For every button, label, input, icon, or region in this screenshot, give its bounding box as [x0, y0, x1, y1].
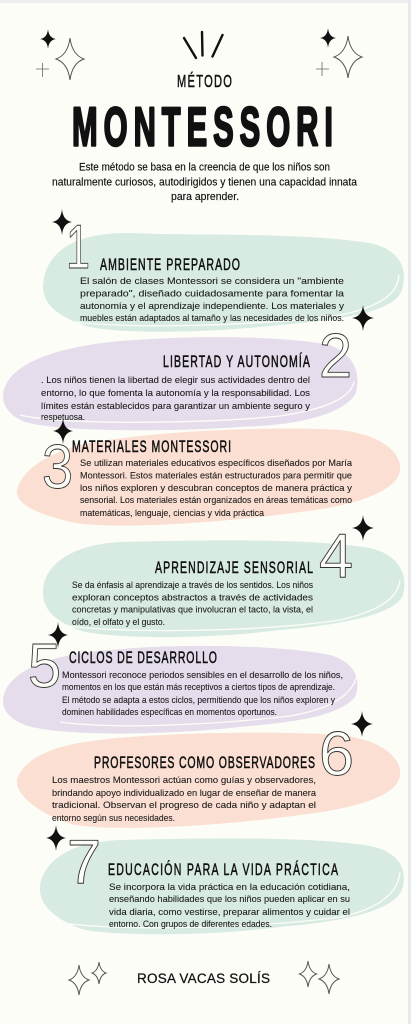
text: aprendizaje sensorial: concretas y manipulativas que involucran el tacto, la vista, el [72, 604, 313, 614]
text: ciclos de desarrollo: momentos en los que están más receptivos a ciertos tipos de aprendizaje. [62, 682, 335, 692]
text: profesores como observadores: brindando apoyo individualizado en lugar de enseñar de manera [52, 788, 316, 798]
heading: ambiente preparado: AMBIENTE PREPARADO [100, 254, 240, 274]
sparkles top right [316, 28, 362, 78]
intro text: Este método se basa en la creencia de que los niños son [79, 162, 330, 174]
author name: ROSA VACAS SOLÍS [137, 971, 270, 986]
number 7: 7 [67, 828, 101, 897]
text: ambiente preparado: El salón de clases Montessori se considera un "ambiente [80, 276, 344, 286]
text: libertad y autonomía [41, 375, 311, 422]
number 1: 1 [66, 213, 90, 282]
text: aprendizaje sensorial [72, 580, 314, 627]
heading: ciclos de desarrollo: CICLOS DE DESARROLLO [69, 647, 217, 667]
text: ciclos de desarrollo: El método se adapta a estos ciclos, permitiendo que los niños exploren y [62, 695, 335, 705]
number 6: 6 [319, 720, 354, 789]
text: ciclos de desarrollo: dominen habilidades específicas en momentos oportunos. [62, 707, 277, 717]
panel: 2 libertad y autonomía [3, 337, 358, 430]
text: libertad y autonomía: respetuosa. [41, 412, 85, 422]
panel: 1 ambiente preparado [43, 233, 404, 332]
heading: libertad y autonomía: LIBERTAD Y AUTONOMÍA [163, 351, 310, 371]
text: materiales montessori: sensorial. Los materiales están organizados en áreas temáticas como [80, 495, 352, 505]
intro text: naturalmente curiosos, autodirigidos y tienen una capacidad innata [52, 176, 357, 188]
text: ambiente preparado: muebles están adaptados al tamaño y las necesidades de los niños. [80, 313, 344, 323]
number 4: 4 [319, 522, 353, 591]
heading: profesores como observadores: PROFESORES COMO OBSERVADORES [94, 752, 315, 772]
text: materiales montessori [80, 458, 353, 518]
number 5: 5 [28, 632, 61, 701]
text: materiales montessori: matemáticas, lenguaje, ciencias y vida práctica [80, 508, 264, 518]
text: materiales montessori: Se utilizan materiales educativos específicos diseñados por María [80, 458, 352, 468]
panel: 4 aprendizaje sensorial [43, 540, 404, 637]
text: materiales montessori: Montessori. Estos materiales están estructurados para permitir que [80, 470, 352, 480]
sparkles footer left [69, 962, 106, 995]
text: educación para la vida práctica: Se incorpora la vida práctica en la educación cotidiana, [109, 882, 350, 892]
solid sparkles beside sections [46, 209, 374, 851]
text: aprendizaje sensorial: Se da énfasis al aprendizaje a través de los sentidos. Los niños [72, 580, 313, 590]
heading: aprendizaje sensorial: APRENDIZAJE SENSORIAL [155, 557, 313, 577]
text: profesores como observadores [52, 775, 316, 823]
text: educación para la vida práctica [109, 882, 350, 929]
text: libertad y autonomía: . Los niños tienen la libertad de elegir sus actividades dentro del [41, 375, 310, 385]
text: educación para la vida práctica: vida diaria, como vestirse, preparar alimentos y cuidar el [109, 907, 350, 917]
title: montessori: MONTESSORI [72, 97, 333, 158]
text: ambiente preparado: preparado", diseñado cuidadosamente para fomentar la [80, 288, 344, 298]
intro text: para aprender. [171, 191, 239, 203]
text: educación para la vida práctica: enseñando habilidades que los niños pueden aplicar en su [109, 894, 350, 904]
text: libertad y autonomía: límites están establecidos para garantizar un ambiente seguro y [41, 401, 311, 411]
text: aprendizaje sensorial: exploran conceptos abstractos a través de actividades [72, 592, 314, 602]
panel: 5 ciclos de desarrollo [3, 646, 358, 734]
heading: materiales montessori: MATERIALES MONTESSORI [72, 436, 231, 456]
text: profesores como observadores: Los maestros Montessori actúan como guías y observadores, [52, 775, 316, 785]
sparkles top left [36, 29, 84, 80]
text: aprendizaje sensorial: oído, el olfato y el gusto. [72, 617, 165, 627]
heading: método: MÉTODO [177, 71, 232, 92]
header rays icon [184, 32, 222, 58]
intro text [52, 162, 357, 203]
text: ambiente preparado [80, 276, 345, 323]
text: materiales montessori: los niños exploren y descubran conceptos de manera práctica y [80, 483, 353, 493]
panel: 3 materiales montessori [17, 428, 400, 526]
panel: 7 educación para la vida práctica [40, 838, 404, 934]
number 3: 3 [42, 433, 73, 502]
text: libertad y autonomía: entorno, lo que fomenta la autonomía y la responsabilidad. Los [41, 388, 311, 398]
text: ciclos de desarrollo: Montessori reconoce periodos sensibles en el desarrollo de los niños, [62, 670, 343, 680]
text: profesores como observadores: tradicional. Observan el progreso de cada niño y adaptan el [52, 800, 316, 810]
text: educación para la vida práctica: entorno. Con grupos de diferentes edades. [109, 919, 272, 929]
number 2: 2 [319, 322, 352, 391]
panel: 6 profesores como observadores [17, 733, 400, 828]
text: ambiente preparado: autonomía y el aprendizaje independiente. Los materiales y [80, 301, 345, 311]
text: profesores como observadores: entorno según sus necesidades. [52, 813, 175, 823]
heading: educación para la vida práctica: EDUCACIÓN PARA LA VIDA PRÁCTICA [108, 859, 338, 879]
text: ciclos de desarrollo [62, 670, 343, 717]
sparkles footer right [300, 961, 339, 994]
